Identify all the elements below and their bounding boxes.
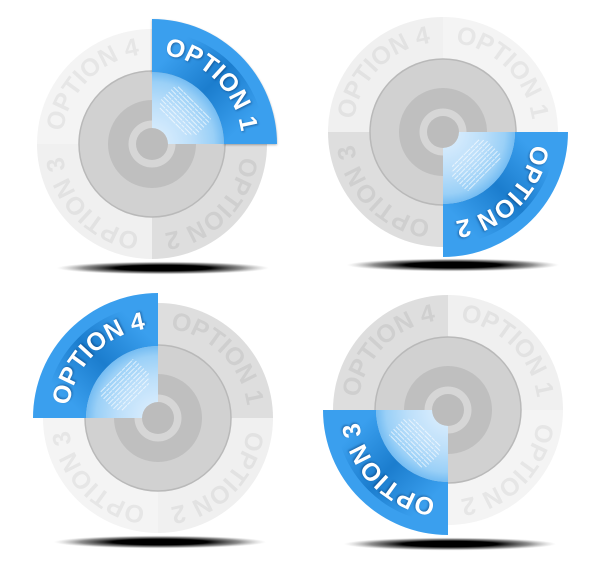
blue quadrant: option 2 [443, 132, 568, 257]
gray quadrant: option 1: OPTION 1 [173, 314, 263, 405]
blue quadrant: option 2: OPTION 2 [454, 147, 548, 240]
blue quadrant: option 4: OPTION 4 [53, 310, 147, 403]
blue quadrant: option 3: OPTION 3 [340, 422, 434, 515]
diagram: option 3 highlighted [323, 295, 563, 550]
shadow [57, 262, 269, 274]
blue quadrant: option 3 [323, 410, 448, 535]
gray quadrant: option 3: OPTION 3 [338, 146, 428, 236]
shadow [344, 538, 556, 550]
gray quadrant: option 1: OPTION 1 [458, 28, 548, 119]
gray quadrant: option 4: OPTION 4 [338, 26, 430, 117]
central gray target [375, 337, 521, 483]
blue quadrant: option 1: OPTION 1 [166, 39, 259, 133]
diagram: option 4 highlighted [33, 293, 273, 548]
gray quadrant: option 4: OPTION 4 [344, 304, 435, 395]
gray quadrant: option 3: OPTION 3 [53, 432, 143, 522]
gray quadrant: option 3: OPTION 3 [47, 158, 137, 248]
gray quadrant: option 2: OPTION 2 [462, 425, 552, 515]
diagram: option 1 highlighted [37, 18, 278, 274]
blue quadrant: option 1 [150, 18, 278, 146]
central gray target [79, 71, 225, 217]
central gray target [85, 345, 231, 491]
central gray target [370, 59, 516, 205]
blue quadrant: option 4 [33, 293, 158, 418]
gray quadrant: option 2: OPTION 2 [165, 159, 256, 249]
gray quadrant: option 4: OPTION 4 [48, 38, 139, 129]
gray quadrant: option 2: OPTION 2 [172, 433, 262, 523]
shadow [347, 258, 559, 272]
shadow [54, 536, 266, 548]
gray quadrant: option 1: OPTION 1 [463, 306, 553, 397]
diagram: option 2 highlighted [328, 17, 568, 272]
